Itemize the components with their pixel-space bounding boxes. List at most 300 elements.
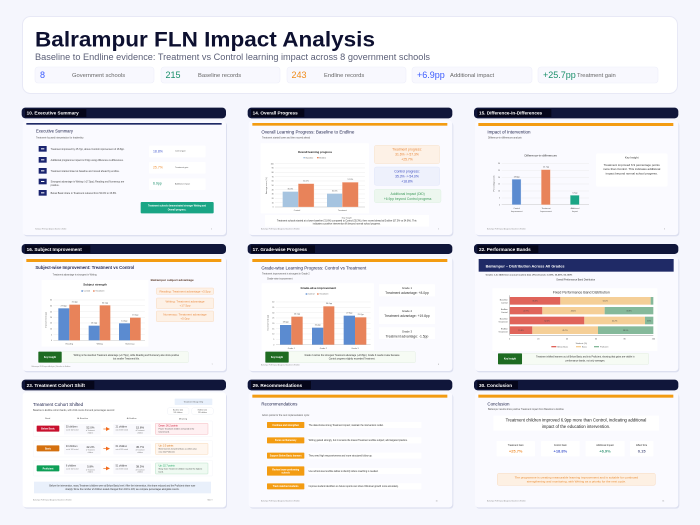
summary note: Before the intervention, many Treatment children were at Below Basic level. After the intervention, this share reduced and the Proficient share rose	[49, 485, 196, 488]
row: below basic: 21 children	[116, 425, 128, 428]
row: below basic: Below Basic	[41, 429, 56, 431]
bar chart: overall learning progress: 20	[272, 198, 274, 200]
recommendation 3: Support Below Basic learners	[270, 454, 302, 457]
bar chart: overall learning progress: 31.6%	[332, 190, 338, 192]
bar chart: grade-wise improvement: 25.7pp	[358, 314, 365, 316]
row: basic: Up: 3.5 points	[159, 445, 174, 448]
bullet list: positive.	[51, 184, 60, 187]
bullet list	[39, 146, 125, 196]
slide subtitle: Treatment advantage is strongest in Writing	[53, 274, 97, 277]
recommendation 4: schools	[281, 472, 291, 474]
bar chart: grade-wise improvement: 30	[272, 312, 274, 314]
callouts: subject advantages: Numeracy: Treatment advantage	[163, 313, 207, 317]
stacked bar chart: 15.8%	[518, 330, 524, 332]
bar chart: overall learning progress	[261, 143, 369, 213]
stat: treatment gain	[538, 67, 658, 83]
slide banner: Balrampur – Distribution Across All Grades	[486, 264, 565, 268]
stacked bar chart: 0	[509, 338, 510, 340]
bar chart: grade-wise improvement: 5	[273, 339, 274, 341]
key insight: Treatment shifted learners out of Below Basic and into Proficient, showing that gains are visible in	[536, 356, 635, 359]
bar chart: difference in differences: Improvement	[540, 210, 552, 213]
bar chart: difference in differences: Treatment	[542, 207, 551, 210]
callout: treatment progress: 31.6% -> 57.3%	[395, 153, 419, 157]
bar chart: subject strength: 20	[50, 317, 52, 319]
bar chart: subject strength: 0	[51, 340, 52, 342]
callouts: subject advantages: +17.5pp	[180, 304, 191, 308]
stat: treatment gain: Treatment Gain	[508, 444, 524, 447]
key insight	[596, 153, 668, 187]
key insight: Grade 2 carries the strongest Treatment advantage (+19.8pp). Grade 3 needs review because	[304, 354, 400, 357]
slide title: Recommendations	[261, 402, 297, 407]
panel: 30. Conclusion	[474, 380, 679, 509]
column labels	[45, 417, 188, 421]
stat: endline records: 243	[292, 70, 307, 80]
slide banner	[479, 259, 674, 272]
bar chart: grade-wise improvement: 36.0pp	[326, 303, 333, 305]
stat: endline records: Endline records	[324, 73, 364, 79]
slide title: Subject-wise Improvement: Treatment vs Control	[35, 265, 134, 270]
row: below basic: 53 children	[66, 425, 78, 428]
row: proficient: of Treatment	[136, 468, 145, 471]
bar chart: overall learning progress: Endline	[319, 158, 327, 160]
callout: treatment progress	[374, 145, 440, 164]
row: below basic	[33, 421, 213, 437]
stacked bar chart: Endline	[501, 309, 509, 311]
section heading bar: 16. Subject Improvement	[27, 247, 82, 252]
bar chart: subject strength: 30	[50, 305, 52, 307]
group tag	[175, 399, 212, 405]
stacked bar chart: 5.8%	[647, 320, 651, 322]
bar chart: subject strength: 10	[50, 329, 52, 331]
stacked bar chart: 40	[566, 338, 568, 340]
bar chart: grade-wise improvement: 15	[272, 328, 274, 330]
stacked bar chart	[492, 288, 657, 351]
section heading bar: 10. Executive Summary	[27, 111, 79, 116]
footer: Balrampur FLN Impact Analysis | Baseline to Endline	[261, 364, 300, 367]
row: proficient: of Treatment	[86, 468, 95, 471]
slide subtitle: Difference-in-differences analysis	[488, 136, 523, 139]
bar chart: grade-wise improvement: 35	[272, 307, 274, 309]
card: grade 2	[379, 307, 435, 324]
bar chart: subject strength: Subject strength	[83, 282, 107, 286]
key insight: Treatment improved 6.9 percentage points	[604, 163, 660, 167]
section heading bar: 23. Treatment Cohort Shift	[27, 383, 85, 388]
stat cards: 18.8%	[153, 150, 163, 154]
stat: control gain: +18.8%	[554, 448, 568, 453]
panel: 22. Performance Bands	[474, 244, 679, 372]
bar chart: subject strength: Reading	[66, 344, 73, 346]
footer: Balrampur FLN Impact Analysis | Baseline to Endline	[261, 228, 300, 231]
bar chart: overall learning progress: Average score (%)	[265, 177, 268, 194]
panel: 15. Difference-in-Differences: 6	[664, 228, 665, 230]
slide subtitle: Baseline to Endline cohort bands, with child counts first and percentages second	[33, 409, 115, 412]
card: grade 3	[379, 327, 435, 339]
recommendation 1: The data shows strong Treatment impact; maintain the intervention model.	[309, 424, 384, 427]
title: Balrampur FLN Impact Analysis	[35, 28, 375, 52]
stat cards: 6.9pp	[153, 182, 162, 186]
bar chart: grade-wise improvement: Improvement (pp)	[266, 315, 269, 331]
stacked bar chart: 100	[652, 338, 655, 340]
section heading bar	[22, 244, 226, 254]
stacked bar chart: 20	[537, 338, 539, 340]
bar chart: subject strength: 15	[50, 323, 52, 325]
card: grade 3: Grade 3	[402, 329, 413, 333]
bar chart: overall learning progress: 90	[272, 168, 274, 170]
key insight	[265, 352, 415, 363]
stat: additional impact: Additional impact	[450, 73, 495, 79]
footer: Balrampur FLN Impact Analysis | Baseline to Endline	[261, 500, 300, 503]
bar chart: grade-wise improvement	[262, 283, 374, 350]
conclusion callout: strengthening and monitoring, with Writing as a priority for the next cycle.	[527, 480, 626, 484]
bar chart: difference in differences: 10	[498, 191, 500, 193]
slide subtitle: Action points for the next implementation cycle:	[262, 414, 310, 417]
panel: 16. Subject Improvement	[22, 244, 227, 372]
row: proficient: Many more Treatment children reached the highest	[159, 467, 203, 470]
stat: treatment gain	[497, 441, 535, 456]
header panel	[22, 16, 678, 94]
row: below basic: of Treatment	[136, 429, 145, 432]
column labels: Band	[45, 418, 51, 420]
callout	[141, 202, 214, 213]
bar chart: subject strength: Writing	[97, 343, 103, 346]
bar chart: overall learning progress: Treatment	[338, 209, 347, 212]
stat: baseline records	[161, 67, 280, 83]
stat: baseline records: Baseline records	[198, 73, 241, 79]
bar chart: subject strength: Numeracy	[125, 343, 135, 346]
bar chart: overall learning progress: 40	[272, 189, 274, 191]
bar chart: subject strength: Improvement (pp)	[44, 312, 47, 328]
bar chart: overall learning progress: 35.3%	[288, 188, 293, 190]
stat: baseline records: 215	[166, 70, 181, 80]
footer: Balrampur FLN Impact Analysis | Baseline to Endline	[32, 365, 70, 368]
bar chart: subject strength	[42, 280, 148, 347]
callout: control progress: 35.3% -> 54.0%	[395, 174, 419, 178]
group tag: Treatment Group Only	[183, 401, 203, 404]
bar chart: subject strength: 35	[50, 300, 52, 302]
panel: 17. Grade-wise Progress: 8	[438, 364, 439, 366]
bar chart: difference in differences: 6.9pp	[573, 192, 578, 194]
bar chart: subject strength: 19.5pp	[132, 315, 139, 317]
bar chart: difference in differences: Control	[513, 207, 520, 210]
panel: 17. Grade-wise Progress	[248, 244, 453, 372]
bar chart: overall learning progress: 10	[272, 202, 274, 204]
stacked bar chart: 35.3%	[532, 301, 538, 303]
callouts: subject advantages	[156, 288, 214, 322]
bar chart: difference in differences: 18.8pp	[514, 176, 521, 178]
bar chart: difference in differences: Difference-in-differences	[524, 154, 557, 158]
stat: effect size	[630, 441, 653, 456]
callouts: subject advantages: Reading: Treatment advantage +3.5pp	[159, 289, 211, 293]
row: below basic: 52.0%	[86, 425, 95, 429]
stat: treatment gain: +25.7%	[509, 448, 523, 453]
key insight: more than Control. This indicates additional	[603, 167, 661, 171]
bar chart: difference in differences	[493, 154, 589, 213]
bar chart: grade-wise improvement: 20	[272, 323, 274, 325]
row: proficient: band.	[159, 471, 164, 473]
stacked bar chart: 80	[624, 338, 626, 340]
recommendation 2	[267, 437, 421, 443]
slide subtitle: Balrampur results show positive Treatment impact from Baseline to Endline	[488, 408, 565, 411]
row: basic	[33, 441, 213, 457]
row: proficient: 51 children	[116, 465, 128, 468]
row: below basic: of Treatment	[86, 429, 95, 432]
bar chart: grade-wise improvement: 25	[272, 318, 274, 320]
key insight: Control progress slightly exceeded Treatment.	[329, 358, 376, 361]
row: proficient	[33, 460, 213, 476]
panel: 14. Overall Progress: 5	[438, 228, 439, 230]
bullet list: Treatment started lower at baseline and moved ahead by endline.	[51, 170, 120, 173]
card: grade 3: Treatment advantage: -1.5pp	[386, 334, 429, 338]
stacked bar chart: Endline	[501, 328, 509, 330]
subject advantage heading: Balrampur subject advantage	[151, 278, 194, 282]
key insight: performance bands, not only averages.	[566, 359, 605, 362]
conclusion callout	[497, 473, 655, 485]
bar chart: difference in differences: 5	[499, 198, 500, 200]
stacked bar chart: Baseline	[500, 319, 509, 321]
recommendation 2: Writing gained strongly, but it remains the lowest Treatment endline subject; add targeted practice.	[309, 439, 408, 442]
footer: Balrampur FLN Impact Analysis | Baseline to Endline	[487, 227, 526, 230]
row: proficient: out of 133 tested	[116, 468, 128, 471]
bar chart: grade-wise improvement: Control	[308, 293, 315, 296]
bar chart: difference in differences: 0	[499, 204, 500, 206]
column labels: At Baseline	[77, 417, 89, 420]
bar chart: grade-wise improvement: 0	[273, 344, 274, 346]
panel: 23. Treatment Cohort Shift	[22, 380, 227, 509]
bar chart: grade-wise improvement: Grade 3	[351, 347, 359, 350]
stacked bar chart: 60	[595, 338, 597, 340]
recommendation 5: Track matched students	[273, 485, 299, 488]
bar chart: difference in differences: 20	[498, 177, 500, 179]
slide subtitle: Treatment improvement is strongest in Grade 2	[262, 272, 310, 275]
stacked bar chart: Control	[501, 301, 508, 304]
bar chart: overall learning progress: 80	[272, 172, 274, 174]
stacked bar chart: Proficient	[600, 346, 609, 349]
bar chart: grade-wise improvement: Grade-wise improvement	[300, 286, 336, 290]
stat: additional impact: +6.9pp	[417, 70, 445, 80]
bar chart: overall learning progress: Control	[294, 209, 301, 212]
row: proficient: children	[88, 471, 93, 474]
key insight: Key Insight	[504, 358, 516, 361]
bullet list: Additional programme impact is 6.9pp using difference-in-differences.	[51, 159, 124, 162]
bar chart: subject strength: 5	[51, 334, 52, 336]
row: proficient: 5.8%	[87, 465, 94, 469]
row: basic: of Treatment	[86, 449, 95, 452]
stacked bar chart: Students (%)	[576, 342, 587, 345]
callout: Overall progress.	[168, 208, 187, 211]
conclusion callout: The programme is creating measurable learning improvement and is suitable for continued	[515, 475, 638, 479]
slide title: Impact of Intervention	[487, 129, 531, 134]
stat: government schools: 8	[40, 70, 45, 80]
key insight: Key Insight	[625, 155, 639, 159]
callout: additional impact: +6.9pp beyond Control progress	[384, 197, 432, 201]
row: basic: 42.2%	[86, 445, 95, 449]
footer: Balrampur FLN Impact Analysis | Baseline to Endline	[487, 500, 526, 503]
bar chart: overall learning progress: Baseline	[306, 158, 314, 160]
column labels: At Endline	[127, 417, 137, 420]
recommendation 3	[267, 453, 421, 459]
stat: effect size: 0.15	[638, 448, 646, 453]
slide subtitle: Grades 1-3 | 1406 learn | actual student data | Fixed bands: 0-35%, 35-55%, 55-100%	[486, 273, 572, 276]
callout: additional impact	[374, 189, 441, 203]
totals pills	[167, 408, 213, 415]
stacked bar chart: Below Basic	[557, 347, 568, 349]
bar chart: subject strength: 30.5pp	[102, 302, 109, 304]
row: below basic: Down: 36.2 points	[159, 425, 178, 428]
card: grade 1	[379, 284, 435, 296]
stacked bar chart: 45.7%	[562, 330, 568, 332]
key insight: Key Insight	[44, 356, 56, 359]
bar chart: difference in differences: Percentage points	[493, 175, 496, 191]
recommendation 1: Continue and strengthen	[272, 424, 300, 427]
row: basic: 45.7%	[136, 445, 144, 449]
stacked bar chart: 52.0%	[544, 320, 550, 322]
callout: additional impact: Additional Impact (DiD)	[391, 192, 425, 196]
callout: treatment progress: +25.7%	[401, 158, 413, 162]
panel: 23. Treatment Cohort Shift: Slide 9	[207, 500, 212, 502]
section heading bar: 29. Recommendations	[253, 383, 302, 388]
callout: control progress: +18.8%	[401, 179, 413, 183]
slide title: Overall Learning Progress: Baseline to Endline	[261, 129, 355, 134]
section heading bar: 15. Difference-in-Differences	[479, 111, 543, 116]
panel: 14. Overall Progress	[248, 108, 453, 236]
bar chart: subject strength: 14.5pp	[121, 320, 128, 322]
card: grade 1: Treatment advantage: +8.0pp	[385, 291, 429, 295]
slide subtitle: Treatment started lower and then moved ahead	[262, 137, 311, 140]
section heading bar	[248, 108, 452, 118]
row: basic: children	[88, 451, 93, 454]
key insight	[498, 353, 649, 364]
totals pills: Endline total	[198, 408, 208, 411]
key insight: impact beyond normal school progress.	[606, 171, 658, 175]
stat: endline records	[287, 67, 406, 83]
bar chart: subject strength: Control	[84, 290, 91, 293]
stat: treatment gain: Treatment gain	[577, 73, 616, 79]
section heading bar: 17. Grade-wise Progress	[253, 247, 307, 252]
bar chart: difference in differences: Additional	[571, 207, 580, 210]
section heading bar	[474, 244, 678, 254]
footer: Balrampur FLN Impact Analysis | Baseline to Endline	[35, 227, 67, 230]
panel: 10. Executive Summary	[22, 108, 227, 236]
row: below basic: children	[137, 431, 143, 434]
callout: Treatment schools demonstrated stronger Writing and	[148, 205, 207, 208]
section heading bar	[474, 380, 678, 390]
row: below basic: out of 133 tested	[116, 428, 128, 431]
bar chart: subject strength: 31.3pp	[72, 302, 79, 304]
bar chart: difference in differences: 25.7pp	[543, 167, 550, 169]
bullet list: Below Basic share in Treatment reduced from 52.0% to 15.8%.	[51, 192, 117, 195]
bar chart: overall learning progress: 54.1%	[303, 180, 309, 182]
bar chart: grade-wise improvement: 16.2pp	[315, 324, 322, 326]
section heading bar: 30. Conclusion	[479, 383, 512, 388]
key insight	[38, 352, 188, 363]
stacked bar chart: 22.7%	[523, 310, 529, 312]
bar chart: difference in differences: Impact	[572, 210, 578, 213]
row: below basic: Fewer Treatment children remained in the	[159, 428, 194, 431]
row: proficient: out of 102 tested	[66, 468, 78, 471]
bar chart: subject strength: Treatment	[95, 290, 105, 293]
row: basic: of Treatment	[136, 449, 145, 452]
bar chart: grade-wise improvement: 18.5pp	[283, 322, 290, 324]
bar chart: grade-wise improvement: Grade 1	[288, 347, 295, 350]
stacked bar chart: 43.4%	[571, 310, 576, 312]
panel: 29. Recommendations: 10	[436, 501, 438, 503]
row: proficient: Up: 32.7 points	[159, 464, 175, 467]
bar chart: grade-wise improvement: 40	[272, 302, 274, 304]
key insight: Writing is the standout Treatment advantage (+17.5pp), while Reading and Numeracy also show positive	[74, 354, 180, 357]
stacked bar chart: 33.9%	[626, 310, 632, 312]
row: basic: More learners moved to Basic as others also	[159, 448, 197, 451]
stat: effect size: Effect Size	[636, 444, 648, 447]
key insight	[265, 215, 429, 227]
stacked bar chart: Baseline	[500, 299, 509, 301]
row: basic: children	[137, 451, 143, 454]
bar chart: overall learning progress: 100	[271, 163, 274, 165]
row: proficient: 38.5%	[136, 465, 144, 469]
bar chart: overall learning progress: 50	[272, 185, 274, 187]
stat: control gain: Control Gain	[554, 444, 567, 447]
row: below basic: out of 102 tested	[66, 428, 78, 431]
stat: additional impact: Additional Impact	[596, 444, 614, 447]
totals pills: Baseline total	[173, 408, 184, 411]
bar chart: grade-wise improvement: 27.3pp	[346, 312, 353, 314]
card: grade 2: Treatment advantage: +19.8pp	[384, 314, 430, 318]
section heading bar	[248, 380, 452, 390]
stacked bar chart: Treatment	[498, 321, 508, 324]
stat: government schools: Government schools	[72, 73, 125, 79]
recommendation 4: Review lower-performing	[272, 468, 300, 471]
bar chart: overall learning progress: Overall learning progress	[298, 150, 333, 154]
stat cards: Control gain	[175, 149, 186, 152]
panel: 15. Difference-in-Differences	[474, 108, 679, 236]
slide title: Conclusion	[487, 402, 510, 407]
subtitle: Baseline to Endline evidence: Treatment vs Control learning impact across 8 government schools	[35, 52, 431, 62]
recommendation 1	[267, 422, 421, 428]
callout: control progress: Control progress:	[394, 169, 420, 173]
stacked bar chart: Basic	[582, 347, 587, 349]
bar chart: difference in differences: 30	[498, 163, 500, 165]
bar chart: subject strength: 25	[50, 311, 52, 313]
key insight: Treatment schools started at a lower baseline (31.6%) compared to Control (35.3%), then moved ahead at Endline (57.3% vs 54.0%). This	[277, 219, 417, 222]
section heading bar	[22, 108, 226, 118]
column labels: Meaning	[179, 419, 188, 421]
bar chart: difference in differences: Improvement	[511, 210, 523, 213]
bar chart: difference in differences: 15	[498, 184, 500, 186]
row: basic: rose into Proficient.	[159, 451, 176, 454]
key insight: Key Insight	[342, 216, 352, 219]
row: below basic: children	[88, 431, 93, 434]
bar chart: grade-wise improvement: Treatment	[319, 293, 329, 296]
bar chart: overall learning progress: 0	[273, 207, 274, 209]
stat cards	[149, 146, 206, 190]
row: proficient: children	[137, 471, 143, 474]
row: basic: out of 102 tested	[66, 448, 78, 451]
main statement: impact of the education intervention.	[542, 424, 610, 429]
chart caption: Grade-wise improvement	[267, 277, 293, 280]
stat: control gain	[541, 441, 580, 456]
stat cards: Treatment gain	[175, 166, 188, 169]
section heading bar: 22. Performance Bands	[479, 247, 531, 252]
bar chart: overall learning progress: 57.3%	[348, 179, 353, 181]
section heading bar: 14. Overall Progress	[253, 111, 298, 116]
key insight: Key Insight	[271, 356, 283, 359]
stacked bar chart: 62.2%	[603, 301, 608, 303]
row: below basic: lowest band.	[159, 431, 170, 434]
stat: treatment gain: +25.7pp	[543, 70, 576, 80]
slide title: Executive Summary	[36, 129, 74, 134]
row: proficient: 6 children	[66, 465, 77, 468]
bullet list: Treatment improved by 25.7pp, above Control improvement of 18.8pp.	[51, 148, 125, 151]
row: below basic: 15.8%	[136, 425, 144, 429]
